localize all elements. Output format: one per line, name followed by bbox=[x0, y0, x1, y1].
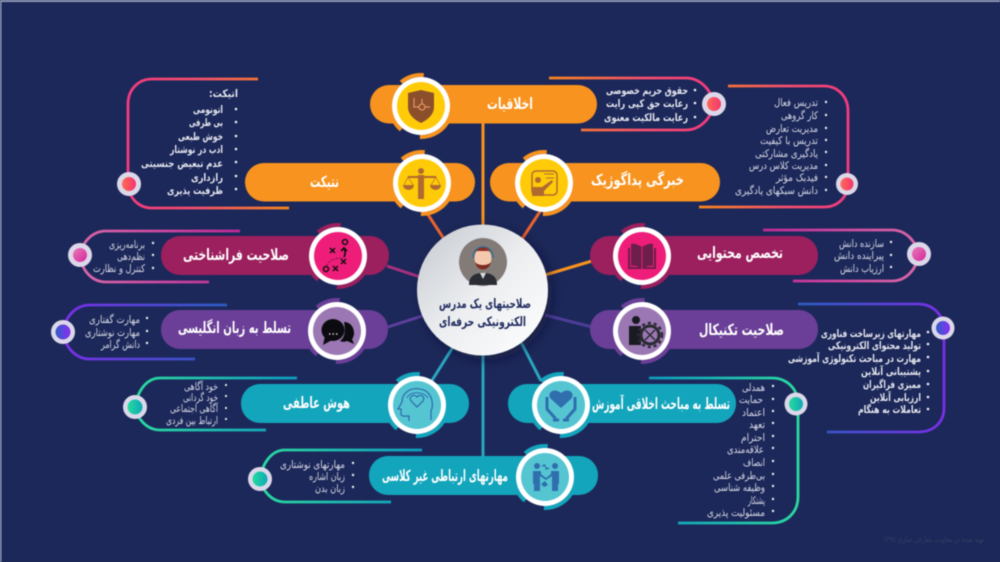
list: non-verbal: زبان بدن bbox=[315, 483, 345, 495]
list: netiquette: عدم تبعیض جنسیتی bbox=[141, 158, 223, 170]
list: educational ethics: پشتکار bbox=[747, 495, 765, 507]
bar: metacognition bbox=[161, 236, 389, 275]
icon: two people exchanging bbox=[516, 448, 574, 506]
connector dot: non-verbal bbox=[248, 467, 272, 491]
list: educational ethics: مسئولیت پذیری bbox=[707, 507, 765, 519]
list: netiquette: اتیکت: bbox=[209, 88, 238, 100]
bracket: metacognition bbox=[81, 231, 240, 282]
heading: technical: صلاحیت تکنیکال bbox=[699, 321, 784, 339]
list: emotional: خود آگاهی bbox=[184, 380, 218, 393]
list: technical: مهارتهای زیرساخت فناوری bbox=[821, 328, 921, 340]
bar: educational ethics bbox=[508, 384, 736, 423]
list: non-verbal bbox=[280, 459, 354, 495]
hub title bbox=[439, 297, 531, 330]
list: content bbox=[834, 238, 892, 275]
bar: emotional bbox=[241, 384, 469, 423]
panel: technical competence bbox=[590, 291, 954, 432]
list: pedagogy: دانش سبکهای یادگیری bbox=[735, 184, 818, 197]
list: metacognition: نظم‌دهی bbox=[117, 251, 145, 263]
panel: pedagogical expertise bbox=[490, 86, 858, 223]
list: english: دانش گرامر bbox=[100, 338, 140, 351]
heading: metacognition: صلاحیت فراشناختی bbox=[183, 246, 289, 264]
heading: non-verbal: مهارتهای ارتباطی غیر کلاسی bbox=[382, 467, 508, 485]
list: ethics: حقوق حریم خصوصی bbox=[606, 85, 688, 97]
heading: english: تسلط به زبان انگلیسی bbox=[178, 318, 291, 337]
bracket: netiquette bbox=[128, 79, 289, 208]
bracket: emotional bbox=[136, 378, 297, 430]
list: english bbox=[85, 313, 148, 351]
bar: technical bbox=[590, 310, 818, 349]
list: technical: ارزیابی آنلاین bbox=[870, 391, 921, 404]
list: educational ethics: حمایت bbox=[739, 394, 763, 406]
bracket: content bbox=[763, 230, 918, 281]
list: pedagogy: تدریس فعال bbox=[774, 97, 818, 109]
list: metacognition: برنامه‌ریزی bbox=[109, 239, 145, 251]
list: netiquette: اتونومی bbox=[193, 104, 223, 116]
list: emotional: خود گردانی bbox=[183, 391, 218, 404]
list: technical: پشتیبانی آنلاین bbox=[861, 365, 921, 378]
connector dot: english bbox=[51, 320, 75, 344]
heading: emotional: هوش عاطفی bbox=[283, 394, 350, 412]
heading: pedagogy: خبرگی پداگوژیک bbox=[591, 170, 684, 190]
list: netiquette bbox=[141, 88, 238, 197]
list: netiquette: خوش طبعی bbox=[178, 131, 223, 143]
list: metacognition: کنترل و نظارت bbox=[93, 263, 145, 275]
list: emotional: ارتباط بین فردی bbox=[166, 415, 218, 427]
icon: shield bbox=[392, 77, 450, 135]
list: technical: تولید محتوای الکترونیکی bbox=[828, 340, 921, 352]
connector dot: netiquette bbox=[117, 172, 141, 196]
list: non-verbal: مهارتهای نوشتاری bbox=[280, 459, 345, 471]
list: content: ارزیاب دانش bbox=[840, 263, 884, 275]
bar: pedagogy bbox=[490, 163, 720, 202]
list: educational ethics: همدلی bbox=[742, 382, 765, 394]
list: netiquette: ظرفیت پذیری bbox=[167, 185, 223, 197]
list: netiquette: رازداری bbox=[191, 172, 223, 184]
list: educational ethics: بی‌طرفی علمی bbox=[713, 470, 765, 482]
list: pedagogy: مدیریت کلاس درس bbox=[749, 160, 818, 172]
bar: netiquette bbox=[245, 163, 475, 202]
bracket: pedagogy bbox=[699, 86, 848, 207]
panel: non-verbal communication bbox=[248, 437, 598, 517]
list: emotional: آگاهی اجتماعی bbox=[170, 402, 219, 415]
list: metacognition bbox=[93, 239, 154, 275]
list: ethics: رعایت حق کپی رایت bbox=[606, 98, 688, 110]
bracket: ethics bbox=[549, 78, 713, 130]
bracket: educational ethics bbox=[649, 378, 798, 523]
icon: head with heart bbox=[388, 376, 446, 434]
panel: netiquette bbox=[117, 79, 475, 223]
list: netiquette: بی طرفی bbox=[189, 117, 223, 129]
hub title: صلاحیتهای یک مدرس bbox=[439, 297, 531, 312]
bar: ethics bbox=[370, 85, 597, 124]
icon: presenter board bbox=[515, 154, 573, 212]
list: educational ethics: علاقه‌مندی bbox=[727, 444, 764, 456]
connector dot: metacognition bbox=[68, 243, 92, 267]
list: pedagogy: فیدبک مؤثر bbox=[775, 172, 818, 184]
panel: english proficiency bbox=[51, 291, 388, 371]
list: pedagogy bbox=[735, 97, 827, 197]
bracket: technical bbox=[798, 304, 944, 432]
list: technical: تعاملات به هنگام bbox=[858, 403, 921, 416]
hub title: الکترونیکی حرفه‌ای bbox=[439, 315, 526, 330]
bracket: english bbox=[64, 305, 227, 359]
list: educational ethics: انصاف bbox=[743, 457, 765, 469]
list: pedagogy: یادگیری مشارکتی bbox=[755, 147, 818, 160]
list: english: مهارت گفتاری bbox=[89, 313, 140, 326]
panel: metacognition bbox=[68, 216, 389, 296]
list: pedagogy: مدیریت تعارض bbox=[766, 123, 818, 135]
list: technical: ممیزی فراگیران bbox=[863, 378, 921, 391]
list: educational ethics: تعهد bbox=[749, 419, 765, 431]
list: emotional bbox=[166, 380, 227, 427]
bar: non-verbal bbox=[369, 456, 598, 495]
connector dot: technical bbox=[932, 316, 954, 340]
list: non-verbal: زبان اشاره bbox=[309, 471, 345, 483]
icon: strategy play bbox=[309, 227, 367, 285]
icon: technician and gear bbox=[613, 302, 671, 360]
heading: netiquette: نتیکت bbox=[310, 173, 339, 191]
list: educational ethics: اعتماد bbox=[742, 407, 765, 419]
list: technical: مهارت در مباحث تکنولوژی آموزشی bbox=[788, 352, 921, 365]
panel: ethics bbox=[370, 66, 726, 146]
panel: content expertise bbox=[590, 216, 931, 296]
connector dot: pedagogy bbox=[836, 173, 858, 195]
list: netiquette: ادب در نوشتار bbox=[169, 144, 223, 156]
list: content: پیراینده دانش bbox=[834, 250, 884, 262]
heading: content: تخصص محتوایی bbox=[697, 244, 783, 262]
list: content: سازنده دانش bbox=[839, 238, 884, 250]
list: pedagogy: تدریس با کیفیت bbox=[760, 135, 818, 147]
heading: ethics: اخلاقیات bbox=[487, 95, 533, 113]
list: english: مهارت نوشتاری bbox=[85, 327, 140, 339]
icon: teacher avatar with headset bbox=[459, 238, 507, 286]
list: educational ethics: احترام bbox=[741, 432, 765, 444]
connector dot: educational ethics bbox=[784, 392, 808, 416]
icon: hands and heart bbox=[532, 376, 590, 434]
list: pedagogy: کار گروهی bbox=[781, 109, 818, 122]
icon: chat bubbles bbox=[308, 302, 366, 360]
icon: scales bbox=[393, 154, 451, 212]
list: ethics bbox=[604, 85, 696, 124]
central hub bbox=[417, 224, 548, 356]
panel: educational ethics bbox=[508, 365, 808, 523]
list: ethics: رعایت مالکیت معنوی bbox=[604, 112, 688, 124]
icon: open book bbox=[613, 227, 671, 285]
connector lines from hub bbox=[387, 120, 592, 458]
list: technical bbox=[788, 328, 929, 416]
connector dot: ethics bbox=[702, 92, 726, 116]
bar: content bbox=[590, 236, 818, 275]
bracket: non-verbal bbox=[261, 450, 422, 502]
list: educational ethics bbox=[707, 382, 774, 519]
connector dot: content bbox=[907, 242, 931, 266]
bar: english bbox=[161, 310, 388, 349]
list: educational ethics: وظیفه شناسی bbox=[714, 482, 765, 494]
heading: educational ethics: تسلط به مباحث اخلاقی آموزش bbox=[592, 394, 730, 413]
panel: emotional intelligence bbox=[123, 365, 469, 445]
connector dot: emotional bbox=[123, 395, 147, 419]
